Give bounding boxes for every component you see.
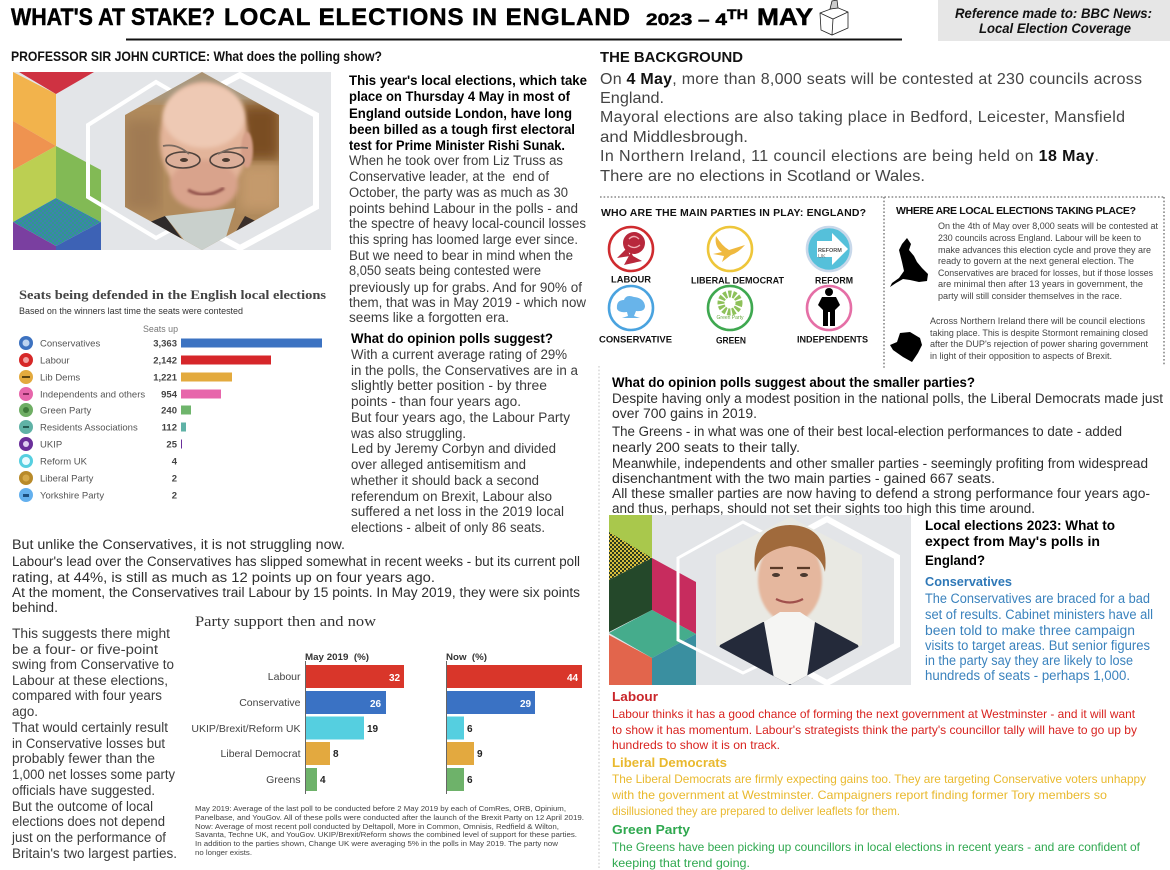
- bar chart: seats being defended: Seats being defended in the English local elections: [19, 287, 326, 302]
- text block: intro: [349, 73, 587, 325]
- icon: Reform arrow: REFORM: [818, 248, 842, 254]
- panel: main parties: REFORM: [815, 276, 853, 286]
- chart footnote: Savanta, Techne UK, and YouGov. UKIP/Brexit/Reform shows the combined level of support for these parties.: [195, 830, 577, 839]
- text: England paragraph: On the 4th of May over 8,000 seats will be contested at: [938, 221, 1158, 231]
- text block: the background: There are no elections in Scotland or Wales.: [600, 168, 925, 185]
- text block: Conservatives: in the party say they are likely to lose: [925, 653, 1133, 668]
- text block: Labour: [612, 689, 1137, 752]
- panel: main parties: WHO ARE THE MAIN PARTIES IN PLAY: ENGLAND?: [601, 207, 866, 219]
- title: 2023 – 4: [646, 10, 728, 29]
- text block: intro: October, the party was as much as 30: [349, 185, 568, 200]
- text: England paragraph: party will still consider themselves in the race.: [938, 291, 1122, 301]
- panel: main parties: [599, 207, 868, 346]
- text block: swing: ago.: [12, 704, 38, 719]
- text block: Conservatives: been told to make three campaign: [925, 623, 1135, 638]
- chart footnote: In addition to the parties shown, Change UK were averaging 5% in the polls in May 2019. The party now: [195, 839, 559, 848]
- bar chart: party support then and now: Now (%): [446, 652, 487, 662]
- bar chart: party support then and now: 26: [370, 699, 382, 710]
- bar chart: party support then and now: Greens: [266, 774, 300, 786]
- text block: smaller parties: The Greens - in what was one of their best local-election performances to date - added: [612, 424, 1122, 439]
- text block: Labour lead: behind.: [12, 600, 58, 615]
- text block: intro: This year's local elections, which take: [349, 73, 587, 88]
- text block: Green Party: [612, 822, 1141, 870]
- text block: intro: previously up for grabs. And for 90% of: [349, 280, 582, 295]
- bar chart: seats being defended: Based on the winners last time the seats were contested: [19, 306, 243, 316]
- text block: what do opinion polls suggest: over alleged antisemitism and: [351, 457, 526, 472]
- reference box: Reference made to: BBC News:: [955, 5, 1152, 21]
- text: England paragraph: Conservatives are braced for losses, but if those losses: [938, 268, 1153, 278]
- text block: swing: elections does not depend: [12, 814, 165, 829]
- text block: swing: But the outcome of local: [12, 799, 153, 814]
- panel: main parties: LIBERAL DEMOCRAT: [691, 276, 784, 286]
- text block: swing: Britain's two largest parties.: [12, 846, 177, 861]
- icon: map of Northern Ireland: [890, 332, 922, 362]
- panel: main parties: GREEN: [716, 336, 746, 346]
- icon: Reform arrow: UK: [818, 254, 826, 260]
- bar chart: seats being defended: Yorkshire Party: [40, 490, 104, 502]
- heading: local elections 2023: [925, 518, 1115, 568]
- text block: intro: But we need to bear in mind when the: [349, 248, 573, 263]
- text block: swing: 1,000 net losses some party: [12, 767, 175, 782]
- text block: smaller parties: and thus, perhaps, should not set their sights too high this time around.: [612, 501, 1035, 516]
- icon: Green Party: Green Party: [717, 315, 744, 321]
- text block: the background: and Middlesbrough.: [600, 129, 748, 146]
- text block: smaller parties: Meanwhile, independents and other smaller parties - seemingly profiting from widespread: [612, 456, 1148, 471]
- chart footnote: May 2019: Average of the last poll to be conducted before 2 May 2019 by each of ComRes, ORB, Opinium,: [195, 804, 566, 813]
- bar chart: seats being defended: 2: [172, 490, 177, 502]
- icon: independents figure: [807, 286, 851, 330]
- icon: map of England: [890, 238, 928, 287]
- text block: smaller parties: Despite having only a modest position in the national polls, the Liberal Democrats made just: [612, 391, 1163, 406]
- bar chart: party support then and now: UKIP/Brexit/Reform UK: [191, 723, 300, 735]
- title: WHAT'S AT STAKE?: [11, 4, 215, 31]
- text block: the background: England.: [600, 90, 664, 107]
- icon: Liberal Democrat bird: [708, 227, 752, 271]
- text: England paragraph: are minimal then after 13 years in government, the: [938, 279, 1143, 289]
- heading: local elections 2023: expect from May's polls in: [925, 534, 1100, 549]
- text block: the background: Mayoral elections are also taking place in Bedford, Leicester, Mansfield: [600, 109, 1125, 126]
- text block: intro: Conservative leader, at the end of: [349, 169, 549, 184]
- bar chart: seats being defended: Liberal Party: [40, 474, 94, 484]
- heading: local elections 2023: England?: [925, 553, 985, 568]
- text block: Liberal Democrats: The Liberal Democrats are firmly expecting gains too. They are targeting Conservative voters unhappy: [612, 772, 1146, 786]
- title: LOCAL ELECTIONS IN ENGLAND: [224, 4, 630, 31]
- bar chart: party support then and now: May 2019 (%): [305, 652, 369, 662]
- text block: smaller parties: disenchantment with the two main parties - gained 667 seats.: [612, 471, 995, 486]
- text block: what do opinion polls suggest: slightly better position - by three: [351, 378, 547, 393]
- text block: intro: test for Prime Minister Rishi Sunak.: [349, 138, 565, 153]
- bar chart: seats being defended: Conservatives: [40, 338, 100, 350]
- text block: intro: When he took over from Liz Truss as: [349, 153, 563, 168]
- reference box: [938, 0, 1170, 41]
- text block: intro: them, that was in May 2019 - which now: [349, 295, 586, 310]
- bar chart: seats being defended: 240: [161, 406, 177, 416]
- icon: Reform arrow: [807, 227, 851, 271]
- text block: Liberal Democrats: Liberal Democrats: [612, 755, 727, 770]
- bar chart: seats being defended: [19, 287, 326, 502]
- bar chart: seats being defended: Independents and others: [40, 390, 145, 400]
- text block: swing: just on the performance of: [11, 830, 166, 845]
- text block: the background: THE BACKGROUND: [600, 49, 743, 66]
- bar chart: seats being defended: 2: [172, 474, 177, 484]
- text: England paragraph: ready to govern at the next general election. The: [938, 256, 1134, 266]
- text block: Conservatives: Conservatives: [925, 574, 1012, 589]
- bar chart: seats being defended: Residents Associations: [40, 422, 138, 434]
- text block: Labour lead: rating, at 44%, is still as much as 12 points up on four years ago.: [12, 570, 435, 585]
- text block: intro: points behind Labour in the polls - and: [349, 201, 578, 216]
- bar chart: party support then and now: 32: [389, 673, 401, 684]
- text block: Labour: hundreds to show it is on track.: [612, 738, 780, 752]
- title: [11, 4, 813, 31]
- photo: BBC reporter: [609, 515, 911, 690]
- text block: swing: probably fewer than the: [12, 751, 155, 766]
- text block: the background: In Northern Ireland, 11 council elections are being held on 18 May.: [600, 148, 1099, 165]
- text block: intro: the spectre of heavy local-council losses: [349, 216, 586, 231]
- text block: intro: England outside London, have long: [349, 106, 572, 121]
- bar chart: seats being defended: 3,363: [153, 338, 177, 350]
- text block: what do opinion polls suggest: was also struggling.: [350, 426, 466, 441]
- panel: main parties: CONSERVATIVE: [599, 334, 672, 344]
- text block: what do opinion polls suggest: referendum on Brexit, Labour also: [351, 489, 552, 504]
- text block: swing: Labour at these elections,: [12, 673, 168, 688]
- text block: intro: place on Thursday 4 May in most of: [349, 89, 570, 104]
- bar chart: seats being defended: Lib Dems: [40, 372, 80, 384]
- title rule: [126, 38, 902, 40]
- panel: main parties: INDEPENDENTS: [797, 334, 868, 344]
- text block: smaller parties: nearly 200 seats to their tally.: [612, 440, 800, 455]
- text block: what do opinion polls suggest: With a current average rating of 29%: [351, 347, 567, 362]
- text block: swing: This suggests there might: [12, 626, 170, 641]
- text block: smaller parties: What do opinion polls suggest about the smaller parties?: [612, 375, 975, 390]
- text block: what do opinion polls suggest: What do opinion polls suggest?: [351, 331, 553, 346]
- chart footnote: Now: Average of most recent poll conducted by Deltapoll, More in Common, Omnisis, Redfield & Wilton,: [195, 822, 559, 831]
- bar chart: party support then and now: [191, 614, 582, 794]
- bar chart: party support then and now: 19: [367, 724, 379, 735]
- reference box: Local Election Coverage: [979, 20, 1131, 36]
- text block: Green Party: The Greens have been picking up councillors in local elections in recent years - and are confident of: [612, 840, 1141, 854]
- bar chart: party support then and now: Conservative: [239, 697, 301, 709]
- bar chart: party support then and now: 4: [320, 775, 326, 786]
- text block: what do opinion polls suggest: [350, 331, 578, 535]
- bar chart: seats being defended: Green Party: [40, 406, 91, 416]
- photo: John Curtice: [13, 72, 331, 250]
- bar chart: party support then and now: Labour: [268, 671, 301, 683]
- text block: what do opinion polls suggest: But four years ago, the Labour Party: [351, 410, 570, 425]
- text block: Labour lead: Labour's lead over the Conservatives has slipped somewhat in recent weeks - but its current poll: [12, 554, 580, 569]
- icon: ballot box: [820, 0, 848, 35]
- text block: Labour lead: [12, 537, 580, 615]
- text block: smaller parties: [612, 375, 1163, 516]
- text block: swing: officials have suggested.: [12, 783, 155, 798]
- text block: swing: [11, 626, 177, 861]
- bar chart: seats being defended: Reform UK: [40, 456, 88, 468]
- panel: where are elections: WHERE ARE LOCAL ELECTIONS TAKING PLACE?: [896, 205, 1136, 217]
- text block: Conservatives: visits to target areas. But senior figures: [925, 638, 1150, 653]
- bar chart: party support then and now: 8: [333, 749, 339, 760]
- icon: Green Party: [708, 286, 752, 330]
- text block: intro: this spring has loomed large ever since.: [349, 232, 578, 247]
- bar chart: seats being defended: Seats up: [143, 324, 178, 334]
- text: England paragraph: make advances this election cycle and prove they are: [938, 245, 1151, 255]
- icon: Labour rose: [609, 227, 653, 271]
- text: England paragraph: 230 councils across England. Labour will be keen to: [938, 233, 1141, 243]
- text block: Conservatives: The Conservatives are braced for a bad: [925, 591, 1150, 606]
- bar chart: seats being defended: 1,221: [153, 372, 178, 384]
- text block: what do opinion polls suggest: suffered a net loss in the 2019 local: [351, 504, 564, 519]
- text block: the background: [600, 49, 1142, 185]
- title: MAY: [757, 4, 813, 31]
- text block: Labour: Labour: [612, 689, 658, 704]
- text block: Labour: to show it has momentum. Labour's strategists think the party's councillor tally will have to go up by: [612, 723, 1137, 737]
- text: England paragraph: [938, 221, 1158, 301]
- text block: what do opinion polls suggest: in the polls, the Conservatives are in a: [351, 363, 578, 378]
- text block: Conservatives: hundreds of seats - perhaps 1,000.: [925, 668, 1130, 683]
- text block: Conservatives: [925, 574, 1153, 683]
- text block: intro: 8,050 seats being contested were: [349, 263, 541, 278]
- text block: smaller parties: All these smaller parties are now having to defend a strong performance four years ago-: [612, 486, 1150, 501]
- text block: what do opinion polls suggest: whether it should back a second: [350, 473, 539, 488]
- bar chart: seats being defended: 954: [161, 390, 178, 400]
- bar chart: party support then and now: 9: [477, 749, 483, 760]
- text: Northern Ireland paragraph: in light of their opposition to aspects of Brexit.: [930, 351, 1112, 361]
- panel: main parties: LABOUR: [611, 274, 652, 284]
- title: TH: [727, 6, 748, 22]
- text block: what do opinion polls suggest: Led by Jeremy Corbyn and divided: [351, 441, 556, 456]
- text block: swing: swing from Conservative to: [12, 657, 174, 672]
- text block: Liberal Democrats: disillusioned they are prepared to deliver leaflets for them.: [612, 804, 900, 818]
- heading: Curtice: PROFESSOR SIR JOHN CURTICE: What does the polling show?: [11, 48, 382, 64]
- text block: smaller parties: over 700 gains in 2019.: [612, 406, 757, 421]
- text block: Liberal Democrats: with the government at Westminster. Campaigners report finding former Tory members so: [611, 788, 1107, 802]
- text block: Labour: Labour thinks it has a good chance of forming the next government at Westminster - and it will want: [612, 707, 1136, 721]
- text block: what do opinion polls suggest: points - than four years ago.: [351, 394, 521, 409]
- bar chart: party support then and now: 29: [520, 699, 532, 710]
- text block: swing: be a four- or five-point: [12, 642, 158, 657]
- bar chart: party support then and now: 6: [467, 724, 473, 735]
- panel: where are elections: [890, 205, 1158, 362]
- icon: Conservative tree: [609, 286, 653, 330]
- bar chart: party support then and now: Liberal Democrat: [221, 748, 301, 760]
- bar chart: party support then and now: Party support then and now: [195, 614, 377, 630]
- text block: the background: On 4 May, more than 8,000 seats will be contested at 230 councils across: [600, 71, 1142, 88]
- text: Northern Ireland paragraph: after the DUP's rejection of power sharing government: [930, 339, 1149, 349]
- text block: intro: seems like a forgotten era.: [349, 310, 509, 325]
- chart footnote: no longer exists.: [195, 848, 252, 857]
- bar chart: party support then and now: 44: [567, 673, 579, 684]
- text block: swing: compared with four years: [12, 688, 162, 703]
- text block: Labour lead: But unlike the Conservatives, it is not struggling now.: [12, 537, 345, 552]
- bar chart: seats being defended: 25: [166, 440, 178, 450]
- bar chart: seats being defended: UKIP: [40, 440, 62, 450]
- bar chart: seats being defended: 2,142: [153, 356, 177, 366]
- text block: intro: been billed as a tough first electoral: [349, 122, 575, 137]
- text: Northern Ireland paragraph: taking place. This is despite Stormont remaining closed: [930, 328, 1148, 338]
- bar chart: seats being defended: 112: [162, 422, 177, 434]
- text block: Liberal Democrats: [611, 755, 1146, 818]
- bar chart: seats being defended: Labour: [40, 356, 70, 366]
- bar chart: seats being defended: 4: [172, 456, 178, 468]
- text block: what do opinion polls suggest: elections - albeit of only 86 seats.: [351, 520, 545, 535]
- chart footnote: Panelbase, and YouGov. All of these polls were conducted after the launch of the Brexit Party on 12 April 2019.: [195, 813, 584, 822]
- text block: Green Party: keeping that trend going.: [612, 856, 750, 870]
- text block: Labour lead: At the moment, the Conservatives trail Labour by 15 points. In May 2019, they were six points: [12, 585, 580, 600]
- bar chart: party support then and now: 6: [467, 775, 473, 786]
- text block: swing: That would certainly result: [12, 720, 168, 735]
- chart footnote: [195, 804, 584, 857]
- text: Northern Ireland paragraph: [930, 316, 1149, 361]
- text block: swing: in Conservative losses but: [12, 736, 165, 751]
- text: Northern Ireland paragraph: Across Northern Ireland there will be council elections: [930, 316, 1145, 326]
- text block: Conservatives: set of results. Cabinet ministers have all: [925, 607, 1153, 622]
- text block: Green Party: Green Party: [612, 822, 691, 837]
- heading: local elections 2023: Local elections 2023: What to: [925, 518, 1115, 533]
